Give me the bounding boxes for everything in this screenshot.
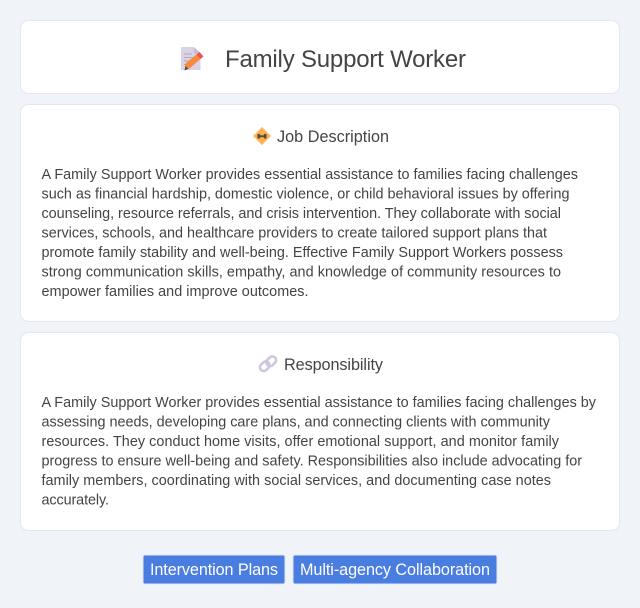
text block: responsibility: A Family Support Worker provides essential assistance to families facing challenges by [42,395,597,411]
tag: intervention plans: Intervention Plans [150,561,278,579]
heading: job description: Job Description [277,128,389,146]
text block: job description: such as financial hardship, domestic violence, or child behavioral issues by offering [42,186,570,202]
text block: job description: promote family stability and well-being. Effective Family Support Workers possess [42,245,563,261]
text block: responsibility: family members, coordinating with social services, and documenting case notes [42,473,551,489]
heading: responsibility: Responsibility [284,356,384,374]
text block: job description: empower families and improve outcomes. [42,284,308,300]
panel: responsibility [20,332,620,530]
text block: responsibility: resources. They conduct home visits, offer emotional support, and monitor family [42,434,560,450]
icon: document with pencil [181,47,204,70]
tag: multi-agency collaboration: Multi-agency Collaboration [300,561,490,579]
panel: job description [20,104,620,322]
text block: job description: A Family Support Worker provides essential assistance to families facing challenges [42,167,578,183]
tag: multi-agency collaboration [293,555,497,584]
text block: job description: services, schools, and healthcare providers to create tailored support plans that [42,226,547,242]
icon: orange diamond [254,128,270,144]
panel: title card [20,20,620,94]
tag: intervention plans [143,555,285,584]
text block: responsibility [42,395,597,508]
title: Family Support Worker [225,46,466,73]
text block: responsibility: progress to ensure well-being and safety. Responsibilities also include advocating for [42,454,582,470]
text block: job description [42,167,578,300]
text block: responsibility: assessing needs, developing care plans, and connecting clients with community [42,414,551,430]
icon: chain link [258,355,278,373]
text block: job description: strong communication skills, empathy, and knowledge of community resources to [42,264,561,280]
text block: responsibility: accurately. [42,492,109,508]
text block: job description: counseling, resource referrals, and crisis intervention. They collaborate with social [42,206,561,222]
